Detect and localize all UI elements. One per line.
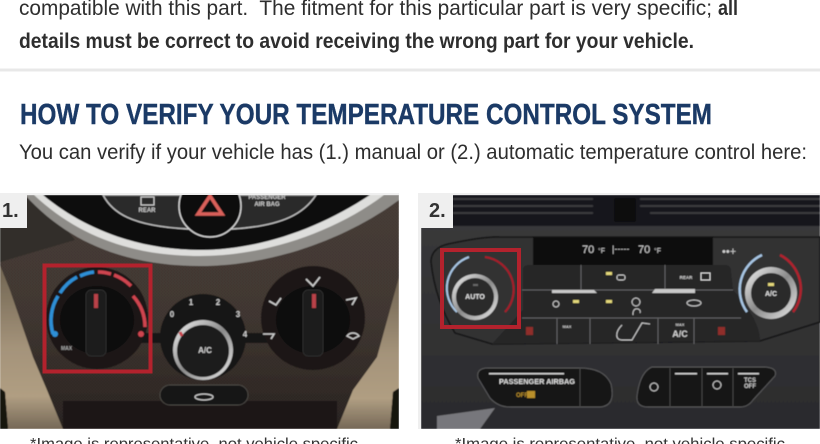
panel: automatic temperature control: 70 [582, 244, 594, 256]
panel: automatic temperature control: °F [598, 247, 605, 255]
panel: automatic temperature control: MAX [676, 322, 685, 327]
panel: manual temperature control: 3 [236, 310, 241, 319]
badge: 2 [418, 195, 453, 228]
panel: automatic temperature control: MAX [563, 324, 572, 329]
badge: 2: 2. [429, 200, 446, 222]
panel: manual temperature control: PASSENGER [248, 195, 286, 201]
panel: manual temperature control: REAR [138, 208, 156, 214]
panel: automatic temperature control: OFF [744, 384, 756, 390]
panel: automatic temperature control: ••+ [722, 246, 736, 258]
panel: automatic temperature control: °F [654, 247, 661, 255]
panel: manual temperature control: 0 [170, 310, 175, 319]
panel: automatic temperature control: |----- [612, 244, 629, 254]
panel: automatic temperature control: REAR [680, 275, 693, 280]
panel: manual temperature control: 4 [243, 330, 248, 339]
highlight box: manual knob [44, 266, 150, 372]
intro paragraph: details must be correct to avoid receiving the wrong part for your vehicle. [19, 30, 694, 53]
badge: 1 [0, 195, 27, 228]
panel: automatic temperature control: 70 [638, 244, 650, 256]
panel: manual temperature control: AIR BAG [254, 202, 280, 208]
panel: automatic temperature control: OFF [516, 393, 528, 399]
panel: automatic temperature control: AUTO [465, 294, 485, 301]
panel: manual temperature control: 2 [216, 298, 221, 307]
highlight box: auto knob [442, 250, 519, 327]
intro paragraph [19, 0, 738, 53]
badge: 1: 1. [2, 200, 19, 222]
panel: automatic temperature control: A/C [672, 329, 688, 339]
panel: automatic temperature control [418, 193, 820, 444]
panel: manual temperature control: MAX [61, 346, 73, 352]
panel: automatic temperature control: PASSENGER AIRBAG [499, 379, 576, 386]
panel: manual temperature control: A/C [198, 346, 212, 355]
panel: manual temperature control: 1 [189, 298, 194, 307]
panel: manual temperature control [0, 175, 399, 444]
panel: automatic temperature control: TCS [744, 378, 756, 384]
subheading: You can verify if your vehicle has (1.) manual or (2.) automatic temperature control here: [19, 141, 807, 164]
panel: automatic temperature control: A/C [765, 291, 777, 298]
